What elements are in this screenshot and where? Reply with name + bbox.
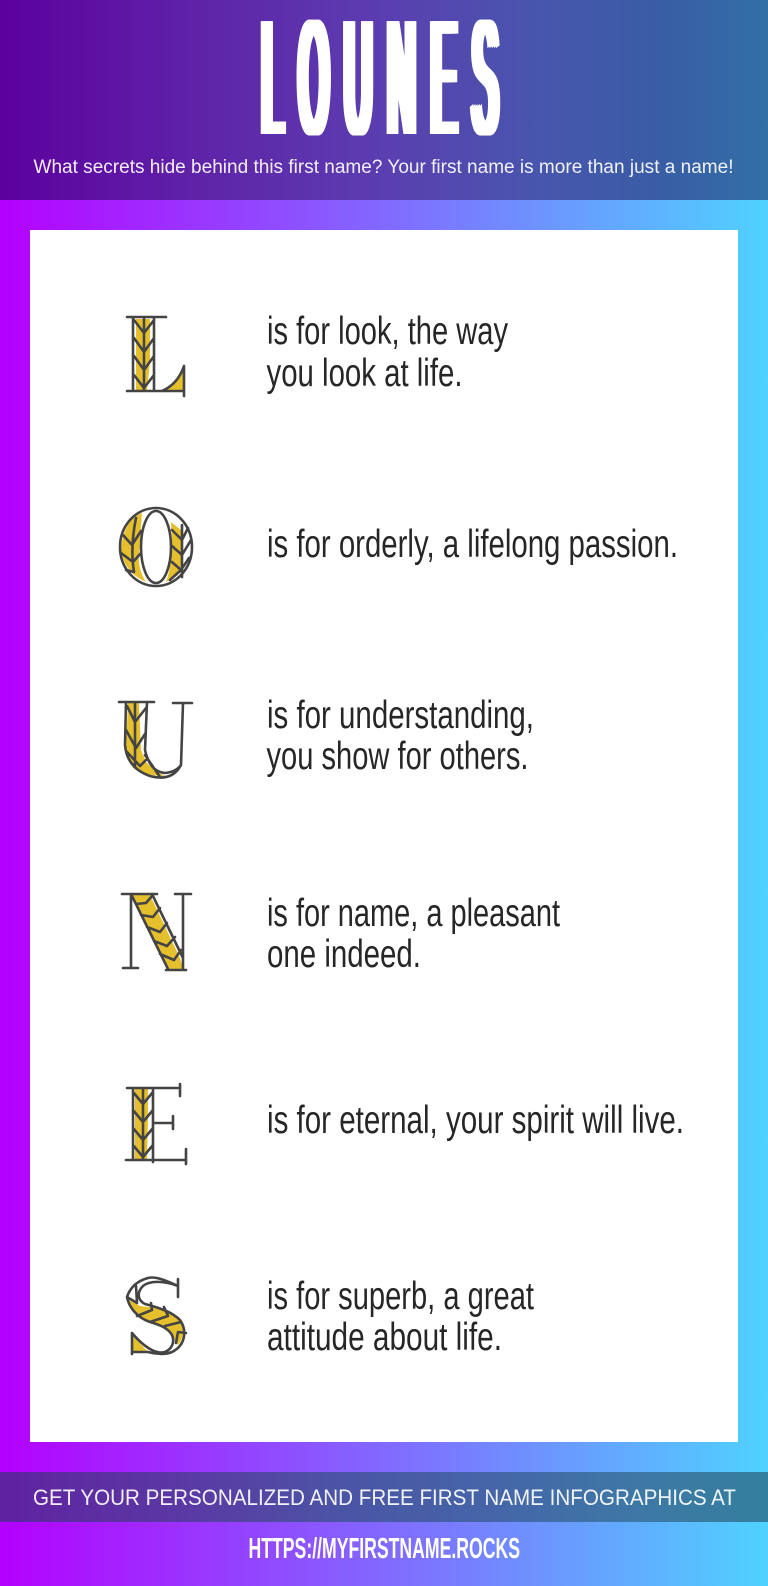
text: S: attitude about life. <box>267 1316 502 1359</box>
text: L: is for look, the way <box>267 310 508 353</box>
icon: letter U <box>119 702 192 778</box>
icon: letter S <box>127 1277 186 1354</box>
text: N <box>267 892 560 976</box>
footer band <box>0 1472 768 1522</box>
icon: letter O <box>120 508 192 586</box>
text: U: is for understanding, <box>267 694 534 737</box>
footer url: HTTPS://MYFIRSTNAME.ROCKS <box>248 1533 520 1565</box>
row: letter O <box>120 508 678 586</box>
row: letter E <box>126 1084 684 1164</box>
text: U <box>266 694 534 778</box>
text: L <box>266 310 508 395</box>
row: letter L <box>127 310 508 396</box>
header band <box>0 0 768 200</box>
text: S <box>267 1275 534 1359</box>
row: letter U <box>119 694 534 778</box>
icon: letter L <box>127 317 184 396</box>
icon: letter E <box>126 1084 186 1164</box>
row: letter S <box>127 1275 534 1359</box>
subtitle: What secrets hide behind this first name? Your first name is more than just a name! <box>34 157 734 178</box>
icon: letter N <box>122 894 191 970</box>
footer band: GET YOUR PERSONALIZED AND FREE FIRST NAME INFOGRAPHICS AT <box>33 1485 736 1510</box>
text: S: is for superb, a great <box>267 1275 534 1318</box>
text: N: is for name, a pleasant <box>267 892 560 935</box>
text: N: one indeed. <box>267 933 421 976</box>
panel: name meanings <box>30 230 738 1442</box>
text: L: you look at life. <box>266 352 462 395</box>
text: U: you show for others. <box>266 735 528 778</box>
row: letter N <box>122 892 560 976</box>
